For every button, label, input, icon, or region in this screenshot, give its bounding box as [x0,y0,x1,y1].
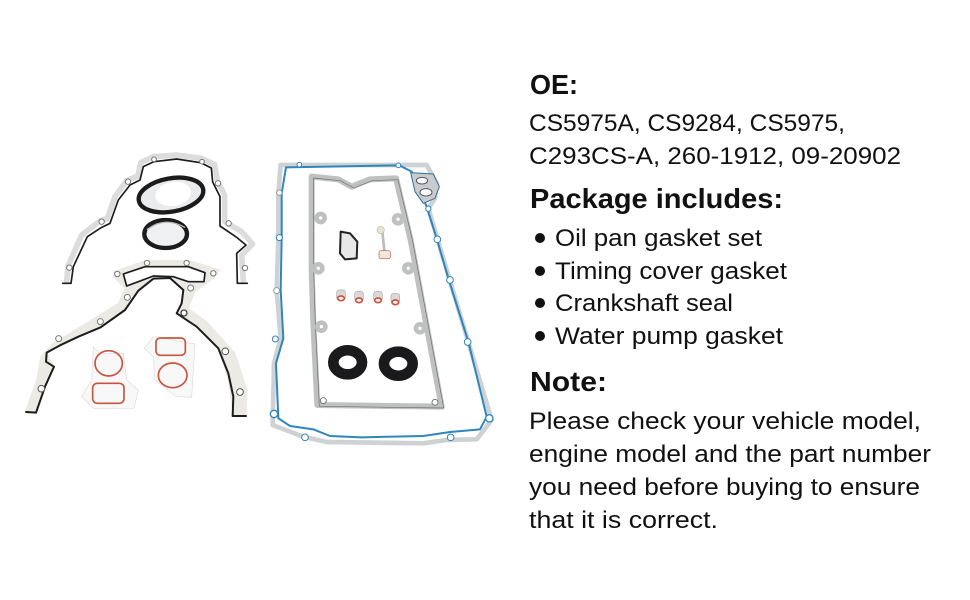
heading: OE: OE: [530,69,578,100]
water pump gaskets with red seals [82,337,195,408]
list: package contents [535,225,787,350]
inner valley cover gasket [312,177,444,408]
panel: oil pan gasket set photo [270,162,493,443]
large crankshaft seal [136,173,206,217]
panel: timing cover gasket set photo [25,155,253,416]
text block: note body: Please check your vehicle model, [529,408,921,435]
text block: note body: you need before buying to ensure [529,474,920,501]
small crankshaft seal [144,220,187,248]
bolt with seal [377,226,390,259]
heading: note: Note: [530,366,607,397]
four small sleeves with red rings [337,290,400,305]
upper timing cover gasket [63,155,253,283]
list: package contents: Water pump gasket [555,323,783,350]
oil pan gasket blue outline [270,162,493,443]
text block: note body: engine model and the part number [529,441,931,468]
list: package contents: Oil pan gasket set [555,225,762,252]
heading: package includes: Package includes: [530,183,783,214]
two black rubber seals [333,350,413,376]
text block: note body [529,408,931,534]
text block: OE part numbers: C293CS-A, 260-1912, 09-20902 [529,143,901,170]
text block: note body: that it is correct. [529,507,718,534]
text block: OE part numbers [529,110,901,170]
text block: OE part numbers: CS5975A, CS9284, CS5975, [529,110,845,137]
small black gasket [340,232,357,259]
list: package contents: Crankshaft seal [555,290,733,317]
list: package contents: Timing cover gasket [555,258,787,285]
lower timing cover gasket [25,260,247,416]
